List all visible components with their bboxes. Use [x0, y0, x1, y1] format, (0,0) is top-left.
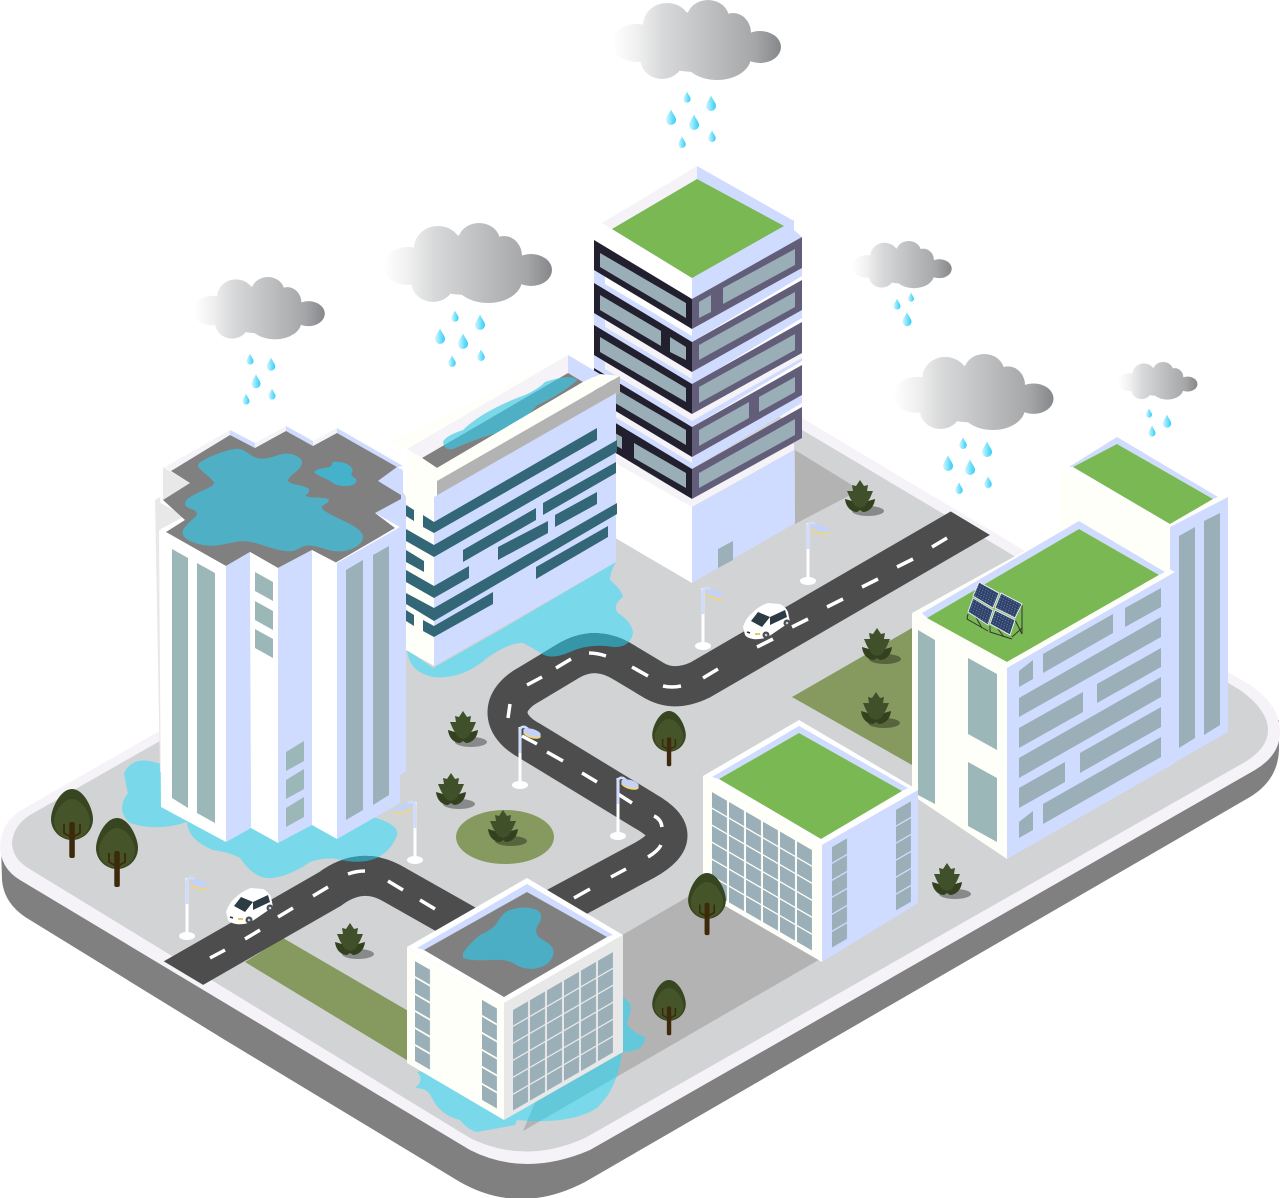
gravel roof [424, 892, 607, 997]
left windows [918, 630, 997, 842]
green roof [719, 733, 902, 839]
tower windows [600, 249, 795, 488]
tower windows right [346, 546, 389, 820]
rain: right small cloud [894, 292, 914, 326]
right window grid [513, 952, 613, 1111]
roof rims [165, 426, 337, 471]
window columns [832, 801, 911, 949]
building shadow: centre tower [795, 450, 860, 524]
rain: right large cloud [943, 437, 992, 494]
bush: lower left [335, 923, 374, 959]
rain: upper middle cloud [435, 311, 485, 367]
platform rim [0, 390, 1280, 1164]
flood water: below slab building [407, 562, 633, 677]
right face [1007, 572, 1175, 859]
blue wall [1170, 497, 1228, 765]
road markings [210, 538, 947, 958]
centre tower [594, 166, 802, 583]
roof water [443, 377, 577, 449]
lawn: lower left [245, 938, 410, 1062]
green roof [1073, 444, 1213, 524]
street lamp: left [179, 878, 209, 940]
street lamp: road middle [695, 588, 725, 650]
roof water: small pool [315, 462, 356, 486]
car: upper road [743, 603, 790, 639]
road [154, 506, 1000, 990]
roof rim [602, 166, 794, 300]
platform base [0, 390, 1280, 1198]
platform side [1, 720, 1279, 1198]
street lamp: road top right [800, 523, 830, 585]
roof water [463, 908, 554, 969]
roof rim [1069, 437, 1218, 499]
window grid [712, 792, 812, 951]
bush: back of centre tower [845, 480, 884, 516]
tree: far left 1 [51, 789, 93, 858]
street lamp: road right [610, 778, 640, 840]
side ledges [163, 467, 190, 500]
roof parapet [594, 223, 692, 299]
car: lower road [226, 888, 274, 924]
dark floor bands [594, 237, 802, 499]
tree: centre [652, 711, 686, 766]
flood water: below front block [415, 997, 645, 1132]
gravel roof [163, 431, 401, 568]
solar panels [967, 582, 1022, 639]
left tower with flooded roof [155, 426, 406, 843]
tower windows left [172, 549, 273, 823]
lawn: circular [456, 810, 554, 864]
cloud: upper middle [383, 223, 552, 303]
bush: right front [932, 863, 971, 899]
tower base [605, 448, 692, 583]
left face [703, 776, 822, 962]
left face [912, 613, 1007, 859]
rain: left cloud [242, 354, 276, 405]
rain: far right cloud [1146, 408, 1171, 437]
windows [1179, 513, 1220, 748]
cloud: top [612, 0, 781, 80]
lawn: right [792, 628, 912, 765]
right rim [1007, 572, 1175, 668]
right face [434, 393, 616, 666]
roof water: main pool [183, 449, 363, 551]
floor slabs [594, 268, 802, 469]
bush: by road left 1 [448, 711, 487, 747]
large front building, right [912, 521, 1175, 859]
bush: by road left 2 [436, 773, 475, 809]
right windows [1019, 588, 1161, 838]
left face [407, 947, 504, 1120]
flood water: around left tower [122, 761, 397, 878]
tree: front [652, 980, 686, 1035]
tall back building, right [1060, 437, 1228, 765]
right face [822, 790, 918, 962]
tower windows lower [286, 741, 304, 827]
front building with flooded roof [407, 878, 623, 1120]
left window columns [415, 961, 497, 1110]
front parapet [406, 374, 620, 497]
left face [406, 480, 434, 666]
building shadow: front blocks [523, 888, 822, 1131]
cream wall [1060, 467, 1170, 600]
teal window bands [406, 428, 617, 637]
cloud: left [193, 277, 325, 339]
rim [912, 521, 1175, 668]
street lamp: road bend [512, 727, 542, 789]
gravel roof [422, 373, 583, 468]
mid building with green roof [703, 720, 918, 962]
cloud: right small [852, 241, 952, 288]
tower faces [159, 530, 226, 842]
rim [407, 878, 623, 1003]
street lamp: near left tower [393, 802, 423, 864]
rim [703, 720, 918, 845]
tree: by mid building [688, 873, 726, 935]
green roof [612, 179, 784, 278]
bush: right lawn upper [862, 628, 901, 664]
back walls [155, 497, 165, 772]
rain: top cloud [666, 92, 716, 148]
green roof [927, 529, 1159, 662]
slab building with flooded roof [388, 355, 620, 666]
cloud: right large [893, 354, 1054, 430]
cloud: far right [1118, 362, 1197, 400]
door [718, 541, 733, 568]
back parapet [388, 355, 568, 458]
platform ground [12, 402, 1268, 1152]
bush: on circular lawn [488, 810, 527, 846]
right face [504, 935, 623, 1120]
bush: right lawn lower [861, 692, 900, 728]
tree: far left 2 [96, 818, 138, 887]
